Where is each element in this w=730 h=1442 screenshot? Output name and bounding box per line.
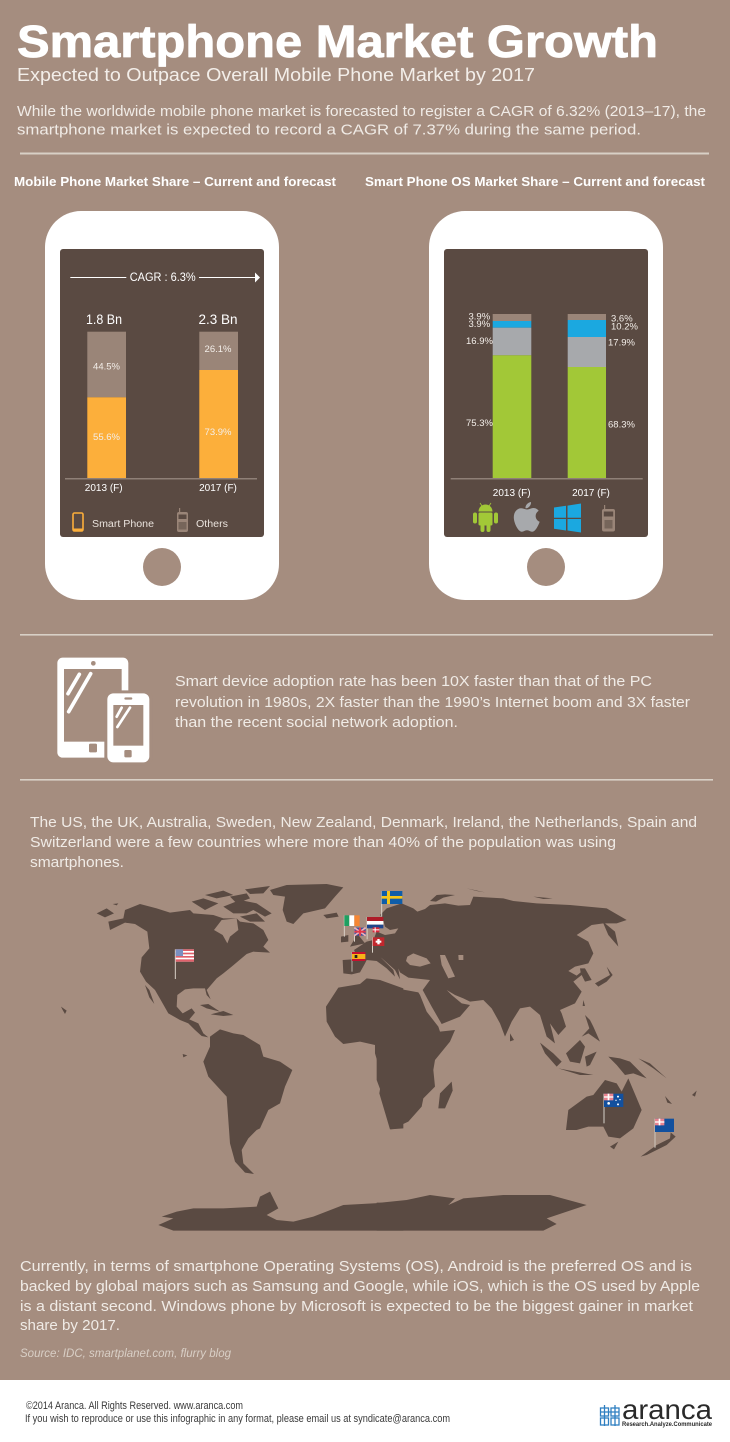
logo: aranca (600, 1394, 713, 1428)
text block: operating systems: backed by global majors such as Samsung and Google, while iOS, which is the OS used by Apple (20, 1279, 700, 1295)
footer (0, 1380, 730, 1442)
panel: mobile phone market share phone (45, 211, 279, 600)
icon: android (473, 503, 498, 532)
legend: smart phone (73, 513, 154, 532)
icon: tablet and smartphone (57, 658, 153, 766)
stacked bar chart: OS share: 75.3% (466, 418, 493, 429)
logo: aranca: aranca (622, 1394, 712, 1425)
flag: New Zealand (654, 1119, 674, 1148)
text block: countries: smartphones. (30, 855, 124, 871)
stacked bar chart: OS share: 10.2% (611, 322, 638, 333)
subtitle: Expected to Outpace Overall Mobile Phone Market by 2017 (17, 65, 535, 85)
flag: Denmark (373, 927, 379, 932)
CAGR arrow (70, 272, 260, 284)
stacked bar chart: mobile phone share: 55.6% (93, 432, 121, 443)
flag: Netherlands (367, 917, 383, 939)
intro text block: smartphone market is expected to record a CAGR of 7.37% during the same period. (17, 122, 641, 138)
stacked bar chart: mobile phone share: 2013 (F) (85, 483, 123, 494)
footer copyright text: If you wish to reproduce or use this infographic in any format, please email us at syndicate@aranca.com (25, 1413, 450, 1425)
stacked bar chart: OS share: 16.9% (466, 336, 493, 347)
CAGR arrow: CAGR : 6.3% (130, 272, 196, 284)
title: Smartphone Market Growth (17, 16, 658, 67)
stacked bar chart: mobile phone share: 1.8 Bn (86, 311, 122, 327)
flag: Australia (603, 1094, 623, 1123)
icon: windows (554, 504, 581, 532)
logo: aranca: Research.Analyze.Communicate (622, 1422, 713, 1428)
stacked bar chart: mobile phone share: 44.5% (93, 362, 121, 372)
flag: USA (175, 949, 194, 979)
stacked bar chart: OS share: 17.9% (608, 338, 635, 349)
text block: countries: The US, the UK, Australia, Sweden, New Zealand, Denmark, Ireland, the Netherlands, Spain and (30, 815, 697, 831)
footer copyright text: ©2014 Aranca. All Rights Reserved. www.aranca.com (26, 1400, 243, 1412)
legend: others (177, 508, 228, 532)
stacked bar chart: OS share: 3.9% (468, 312, 491, 322)
text block: operating systems (20, 1259, 700, 1334)
heading: smart phone OS market share: Smart Phone OS Market Share – Current and forecast (365, 175, 706, 189)
intro text block: While the worldwide mobile phone market is forecasted to register a CAGR of 6.32% (2013–17), the (17, 104, 706, 120)
text block: adoption rate (175, 674, 690, 731)
footer copyright text (25, 1400, 450, 1425)
text block: adoption rate: Smart device adoption rate has been 10X faster than that of the PC (175, 674, 652, 690)
flag: Ireland (344, 915, 360, 937)
legend: others: Others (196, 519, 228, 530)
stacked bar chart: OS share (451, 312, 643, 499)
text block: operating systems: Currently, in terms of smartphone Operating Systems (OS), Android is the preferred OS and is (20, 1259, 692, 1275)
text block: adoption rate: than the recent social network adoption. (175, 715, 458, 731)
heading: mobile phone market share: Mobile Phone Market Share – Current and forecast (14, 175, 337, 189)
panel: smart phone OS market share phone (429, 211, 663, 600)
stacked bar chart: OS share: 2013 (F) (493, 488, 531, 499)
stacked bar chart: mobile phone share (65, 311, 257, 494)
intro text block (17, 104, 706, 138)
stacked bar chart: mobile phone share: 73.9% (205, 427, 232, 438)
flag: Sweden (381, 891, 402, 917)
stacked bar chart: mobile phone share: 2.3 Bn (198, 311, 238, 327)
stacked bar chart: mobile phone share: 26.1% (205, 344, 232, 355)
stacked bar chart: OS share: 68.3% (608, 419, 635, 430)
source note: Source: IDC, smartplanet.com, flurry blog (20, 1348, 232, 1360)
stacked bar chart: OS share: 3.9% (468, 319, 491, 330)
flag: Switzerland (372, 937, 384, 953)
icon: apple (514, 502, 540, 532)
flag: Spain (351, 952, 365, 972)
flag: UK (354, 928, 366, 942)
stacked bar chart: OS share: 2017 (F) (572, 488, 610, 499)
text block: adoption rate: revolution in 1980s, 2X faster than the 1990’s Internet boom and 3X faster (175, 695, 690, 711)
stacked bar chart: OS share: 3.6% (611, 314, 633, 325)
text block: operating systems: share by 2017. (20, 1318, 120, 1334)
legend: smart phone: Smart Phone (92, 519, 154, 530)
text block: operating systems: is a distant second. Windows phone by Microsoft is expected to be the biggest gainer in market (20, 1299, 693, 1315)
world map (61, 884, 697, 1231)
stacked bar chart: mobile phone share: 2017 (F) (199, 483, 237, 494)
text block: countries: Switzerland were a few countries where more than 40% of the population was using (30, 835, 616, 851)
text block: countries (30, 815, 697, 871)
icon: mobile phone (602, 505, 615, 532)
